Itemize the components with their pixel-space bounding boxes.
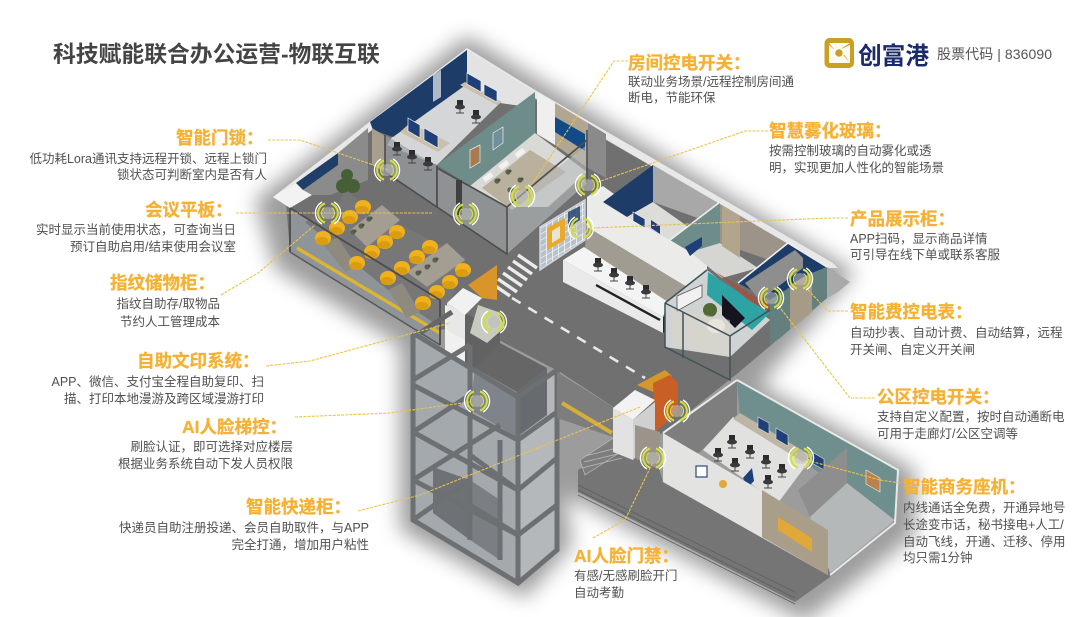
- callout: room power switch: [628, 53, 794, 105]
- callout: fingerprint locker: [110, 273, 220, 329]
- callout: smart parcel locker: [119, 497, 369, 552]
- callout: meeting tablet: 会议平板：: [145, 200, 232, 220]
- callout: smart privacy glass: 智慧雾化玻璃：: [769, 121, 892, 141]
- callout: self-service printing: 自助文印系统：: [137, 351, 260, 371]
- callout: AI face access control: 自动考勤: [574, 586, 624, 600]
- callout: fingerprint locker: 节约人工管理成本: [120, 314, 220, 329]
- callout: smart door lock: 锁状态可判断室内是否有人: [117, 167, 267, 182]
- callout: AI face elevator control: [118, 417, 293, 471]
- callout: AI face elevator control: 根据业务系统自动下发人员权限: [118, 456, 293, 471]
- callout: meeting tablet: 预订自助启用/结束使用会议室: [70, 239, 236, 254]
- callout: room power switch: 联动业务场景/远程控制房间通: [628, 74, 794, 89]
- lower right office: [663, 380, 898, 575]
- left corner block: [273, 183, 312, 208]
- gate block with orange cabinet: [613, 370, 678, 470]
- plant: [336, 169, 360, 193]
- callout: smart parcel locker: 快递员自助注册投递、会员自助取件，与APP: [119, 520, 369, 535]
- logo: company brand and stock code: 股票代码 | 836090: [937, 46, 1052, 62]
- callout: AI face access control: 有感/无感刷脸开门: [574, 568, 677, 583]
- callout: self-service printing: 描、打印本地漫游及跨区域漫游打印: [64, 392, 264, 406]
- lower slab and stairs: [578, 437, 830, 604]
- room: top office: [370, 50, 535, 207]
- connector lines: [221, 61, 900, 538]
- callout: smart door lock: 低功耗Lora通讯支持远程开锁、远程上锁门: [29, 151, 267, 166]
- icon: logo mark: [824, 38, 854, 68]
- callout: public area power switch: 可用于走廊灯/公区空调等: [877, 426, 1018, 441]
- elevator tower: [413, 305, 557, 583]
- gate: fingerprint locker block: [420, 265, 505, 343]
- callout: AI face access control: [574, 546, 679, 600]
- outer back wall: [273, 48, 838, 268]
- room: co-working area with yellow chairs: [290, 169, 471, 345]
- logo: company brand and stock code: 创富港: [858, 42, 929, 70]
- callout: product display cabinet: APP扫码，显示商品详情: [850, 231, 988, 246]
- room: upper right offices: [603, 165, 850, 345]
- callout: smart prepaid meter: [850, 302, 1063, 357]
- callout: product display cabinet: 产品展示柜：: [850, 209, 955, 229]
- callout: meeting tablet: [36, 200, 236, 254]
- callout: smart business phone: 自动飞线，开通、迁移、停用: [903, 534, 1066, 549]
- logo: company brand and stock code: [824, 38, 1052, 70]
- callout: smart business phone: 内线通话全免费，开通异地号: [903, 500, 1066, 515]
- callout: smart business phone: 智能商务座机：: [903, 477, 1026, 497]
- road dashes: [512, 298, 645, 378]
- corridor side wall: [557, 372, 613, 437]
- callout: smart business phone: 长途变市话，秘书接电+人工/: [903, 517, 1064, 532]
- callout: smart door lock: 智能门锁：: [176, 128, 264, 148]
- callout: smart privacy glass: 按需控制玻璃的自动雾化或透: [769, 143, 932, 158]
- callout: fingerprint locker: 指纹自助存/取物品: [117, 296, 220, 311]
- callout: AI face elevator control: 刷脸认证，即可选择对应楼层: [130, 439, 293, 454]
- icon: IoT sensor markers: [315, 159, 814, 469]
- callout: AI face elevator control: AI人脸梯控：: [182, 417, 287, 437]
- ground shadow: [255, 36, 915, 617]
- room: reception and long wall: [563, 186, 707, 333]
- callout: product display cabinet: 可引导在线下单或联系客服: [850, 247, 1001, 262]
- room: corner glass lounge with mural: [665, 270, 770, 380]
- crosswalk: [494, 255, 537, 296]
- callout: self-service printing: [51, 351, 264, 406]
- callout: smart privacy glass: 明，实现更加人性化的智能场景: [769, 160, 944, 175]
- callout: smart parcel locker: 智能快递柜：: [246, 497, 351, 517]
- callout: public area power switch: 公区控电开关：: [877, 387, 1000, 407]
- callout: room power switch: 房间控电开关：: [628, 53, 750, 73]
- callout: smart door lock: [29, 128, 267, 182]
- callout: room power switch: 断电，节能环保: [628, 90, 716, 105]
- callout: self-service printing: APP、微信、支付宝全程自助复印、扫: [51, 374, 264, 389]
- callout: smart parcel locker: 完全打通，增加用户粘性: [231, 537, 369, 552]
- callout: AI face access control: AI人脸门禁：: [574, 546, 679, 566]
- callout: fingerprint locker: 指纹储物柜：: [110, 273, 215, 293]
- callout: smart business phone: [903, 477, 1066, 565]
- callout: product display cabinet: [850, 209, 1001, 262]
- callout: smart prepaid meter: 自动抄表、自动计费、自动结算，远程: [850, 325, 1063, 340]
- title: 科技赋能联合办公运营-物联互联: [53, 41, 380, 67]
- callout: smart privacy glass: [769, 121, 944, 175]
- callout: meeting tablet: 实时显示当前使用状态，可查询当日: [36, 222, 236, 237]
- callout: public area power switch: [877, 387, 1065, 441]
- room: glass meeting room: [437, 92, 606, 254]
- callout: smart business phone: 均只需1分钟: [903, 550, 972, 565]
- product display rack: [540, 200, 585, 270]
- floor plan: main road and floor: [273, 48, 838, 440]
- callout: public area power switch: 支持自定义配置，按时自动通断电: [877, 409, 1065, 424]
- callout: smart prepaid meter: 开关闸、自定义开关闸: [850, 342, 975, 357]
- callout: smart prepaid meter: 智能费控电表：: [850, 302, 972, 322]
